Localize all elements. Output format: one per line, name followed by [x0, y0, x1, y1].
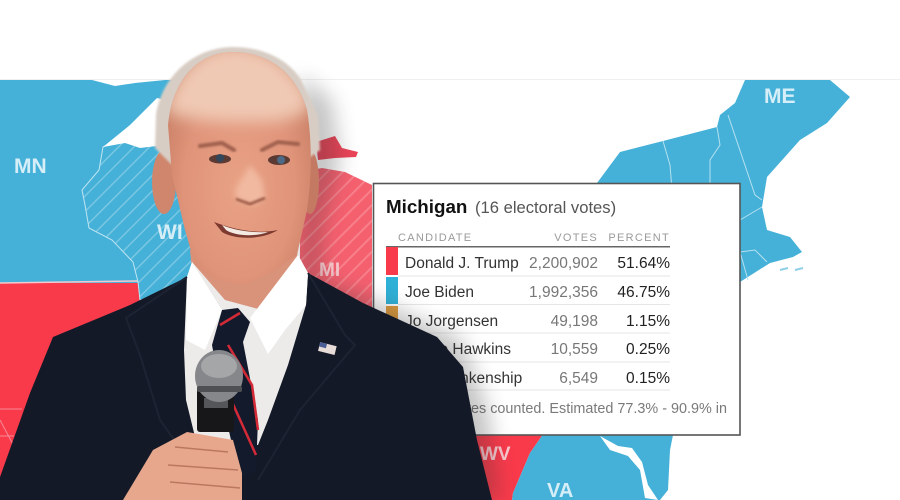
- label: WV: WV: [480, 444, 511, 465]
- person: Joe Biden: [0, 45, 492, 500]
- row: Donald J. Trump: 2,200,902: [529, 255, 598, 272]
- microphone: [195, 350, 243, 432]
- map: northeast states: [597, 80, 850, 310]
- necktie: [212, 308, 258, 480]
- map: southern states: [470, 430, 674, 500]
- row: Joe Biden: Joe Biden: [405, 284, 474, 301]
- electoral votes note: (16 electoral votes): [475, 198, 616, 217]
- state: Michigan upper peninsula: [316, 136, 358, 160]
- row: Jo Jorgensen: Jo Jorgensen: [405, 313, 498, 330]
- label: MN: MN: [14, 155, 47, 178]
- lapel seams: [126, 273, 355, 480]
- nose: [235, 165, 265, 205]
- flag pin: [318, 342, 337, 355]
- row: Jo Jorgensen: 1.15%: [626, 313, 670, 330]
- panel heading: Michigan: [386, 196, 467, 217]
- brows: [200, 142, 298, 150]
- row: Don Blankenship: Don Blankenship: [405, 370, 522, 387]
- forehead highlight: [165, 45, 312, 122]
- row: Don Blankenship: 0.15%: [626, 370, 670, 387]
- footnote: votes counted. Estimated 77.3% - 90.9% in: [452, 401, 727, 417]
- row: Donald J. Trump: Donald J. Trump: [405, 255, 519, 272]
- row: Jo Jorgensen: [386, 306, 670, 333]
- row: Howie Hawkins: [405, 341, 670, 358]
- chesapeake bay: [600, 436, 658, 500]
- row: Howie Hawkins: Howie Hawkins: [405, 341, 511, 358]
- eyes: [209, 154, 290, 165]
- table header: VOTES: [554, 232, 598, 244]
- panel: Michigan results: [374, 184, 740, 435]
- person shadow: [300, 75, 500, 500]
- label: ME: ME: [764, 85, 796, 108]
- head: [168, 52, 311, 285]
- ear right: [301, 150, 319, 214]
- county lines: [0, 409, 22, 450]
- shirt and collar: [184, 255, 308, 445]
- hair: [155, 47, 320, 165]
- table header: PERCENT: [608, 232, 670, 244]
- label: MI: MI: [319, 260, 340, 281]
- row: Don Blankenship: 6,549: [559, 370, 598, 387]
- suit jacket: [0, 273, 492, 500]
- map: midwest states: [0, 80, 372, 500]
- table header: [398, 232, 670, 244]
- state: Michigan hatched: [300, 168, 372, 320]
- row: Howie Hawkins: 0.25%: [626, 341, 670, 358]
- label: WI: WI: [157, 221, 183, 244]
- neck: [190, 250, 300, 330]
- smile: [214, 222, 278, 238]
- row: Donald J. Trump: [386, 247, 670, 275]
- state: Wisconsin hatched: [82, 120, 195, 300]
- row: Don Blankenship: [405, 370, 670, 387]
- lake superior: [92, 80, 165, 148]
- hand: [123, 432, 242, 500]
- row: Donald J. Trump: 51.64%: [617, 255, 670, 272]
- row: Joe Biden: 46.75%: [617, 284, 670, 301]
- table header: CANDIDATE: [398, 232, 472, 244]
- ear left: [152, 150, 176, 214]
- row: Jo Jorgensen: 49,198: [551, 313, 598, 330]
- row: Joe Biden: [386, 277, 670, 304]
- row: Joe Biden: 1,992,356: [529, 284, 598, 301]
- row: Howie Hawkins: 10,559: [551, 341, 598, 358]
